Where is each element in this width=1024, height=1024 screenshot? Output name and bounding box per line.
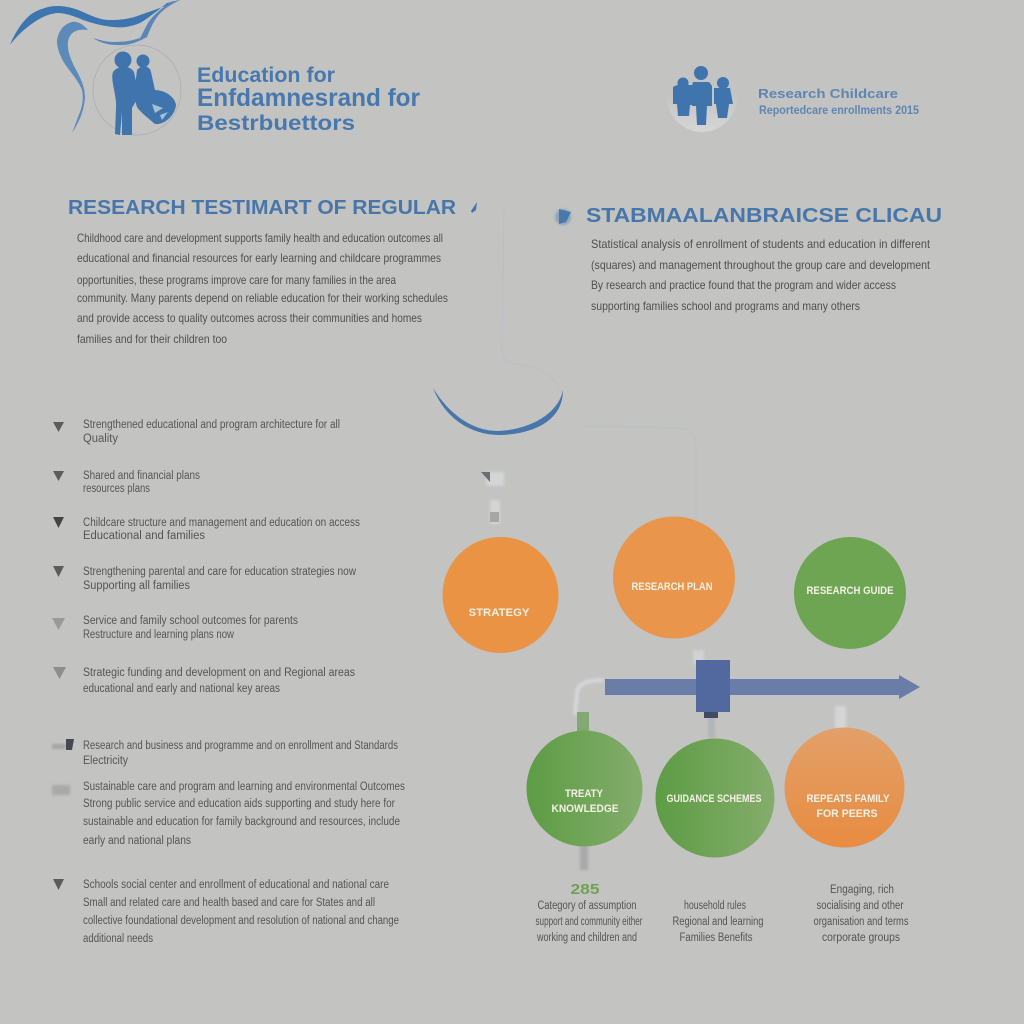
text block: right intro: By research and practice found that the program and wider access [591, 278, 896, 292]
bullet list text: Strengthening parental and care for education strategies now [83, 566, 357, 578]
logo: swoosh and two figures [10, 0, 181, 135]
circle: orange lower right: REPEATS FAMILY [806, 793, 890, 805]
bullet list text: sustainable and education for family background and resources, include [83, 816, 400, 828]
caption: lower centre: Regional and learning [672, 916, 764, 928]
top right caption: Reportedcare enrollments 2015 [759, 103, 919, 117]
text block: left intro: educational and financial resources for early learning and childcare programmes [77, 251, 441, 265]
text block: left intro: Childhood care and development supports family health and education outcomes all [77, 231, 443, 245]
caption: lower right: socialising and other [816, 900, 904, 912]
bullet list text: additional needs [83, 933, 153, 945]
bullet list text: Supporting all families [83, 580, 190, 592]
bullet list text: Strategic funding and development on and Regional areas [83, 667, 355, 679]
caption: lower centre: household rules [684, 900, 746, 912]
text block: right intro: supporting families school and programs and many others [591, 299, 860, 313]
circle: green lower left: TREATY [565, 788, 604, 800]
title: Education for [197, 64, 335, 87]
top right caption: Research Childcare [758, 86, 898, 101]
bullet list text: Research and business and programme and on enrollment and Standards [83, 740, 398, 752]
text block: left intro: community. Many parents depend on reliable education for their working schedules [77, 291, 448, 305]
connector: curved line [433, 206, 696, 520]
text block: left intro: opportunities, these programs improve care for many families in the area [77, 273, 396, 287]
title: Bestrbuettors [197, 112, 355, 135]
circle: green lower centre [656, 738, 774, 858]
caption: lower right: organisation and terms [814, 916, 909, 928]
caption: lower left with figure [536, 881, 643, 944]
bullet list text: Electricity [83, 755, 128, 767]
arrow: horizontal timeline [605, 660, 920, 712]
bullet list text: educational and early and national key areas [83, 683, 280, 695]
caption: lower right [814, 884, 909, 944]
bullet list text: Service and family school outcomes for parents [83, 615, 298, 627]
icon: group of three people [667, 62, 737, 132]
bullet icons [52, 422, 74, 890]
bullet list text: Sustainable care and program and learning and environmental Outcomes [83, 781, 405, 793]
text block: right intro: (squares) and management throughout the group care and development [591, 258, 931, 272]
bullet list text: Schools social center and enrollment of educational and national care [83, 879, 389, 891]
caption: lower left with figure: Category of assumption [538, 900, 636, 912]
text block: right intro: Statistical analysis of enrollment of students and education in different [591, 237, 931, 251]
circle: orange lower right: FOR PEERS [816, 808, 878, 820]
text block: left intro: families and for their children too [77, 332, 227, 346]
bullet list text: resources plans [83, 483, 150, 495]
text block: left intro [77, 231, 448, 346]
bullet list text: Educational and families [83, 530, 205, 542]
bullet list text: Strong public service and education aids supporting and study here for [83, 798, 395, 810]
caption: lower left with figure: support and community either [536, 916, 643, 928]
title: Enfdamnesrand for [197, 84, 420, 112]
caption: lower left with figure: working and children and [536, 932, 637, 944]
top right caption [758, 86, 919, 117]
bullet list text: Small and related care and health based and care for States and all [83, 897, 375, 909]
caption: lower centre: Families Benefits [680, 932, 753, 944]
circle: orange lower right [784, 728, 904, 848]
heading: right section: STABMAALANBRAICSE CLICAU [586, 205, 942, 227]
circle: green lower centre: GUIDANCE SCHEMES [666, 793, 762, 805]
bullet list text: Quality [83, 433, 118, 445]
bullet list text: Childcare structure and management and education on access [83, 517, 360, 529]
circle: orange centre: RESEARCH PLAN [632, 581, 713, 593]
bullet list text: early and national plans [83, 835, 191, 847]
circle: green right: RESEARCH GUIDE [806, 585, 894, 597]
circle: green lower left [526, 730, 642, 846]
circle: orange left [442, 537, 558, 653]
text block: left intro: and provide access to quality outcomes across their communities and homes [77, 311, 422, 325]
bullet list text: Restructure and learning plans now [83, 629, 235, 641]
heading: left section: RESEARCH TESTIMART OF REGULAR [68, 197, 457, 219]
bullet list text [83, 419, 405, 945]
connector stubs [481, 472, 846, 870]
caption: lower right: corporate groups [822, 932, 900, 944]
circle: orange centre [613, 516, 735, 638]
text block: right intro [591, 237, 931, 313]
caption: lower right: Engaging, rich [830, 884, 894, 896]
caption: lower centre [672, 900, 764, 944]
title [197, 64, 420, 135]
bullet list text: Shared and financial plans [83, 470, 200, 482]
circle: orange left: STRATEGY [468, 607, 530, 619]
bullet list text: collective foundational development and resolution of national and change [83, 915, 399, 927]
circle: green right [794, 537, 906, 649]
bullet list text: Strengthened educational and program architecture for all [83, 419, 340, 431]
circle: green lower left: KNOWLEDGE [552, 803, 618, 815]
caption: lower left with figure: 285 [570, 881, 600, 898]
